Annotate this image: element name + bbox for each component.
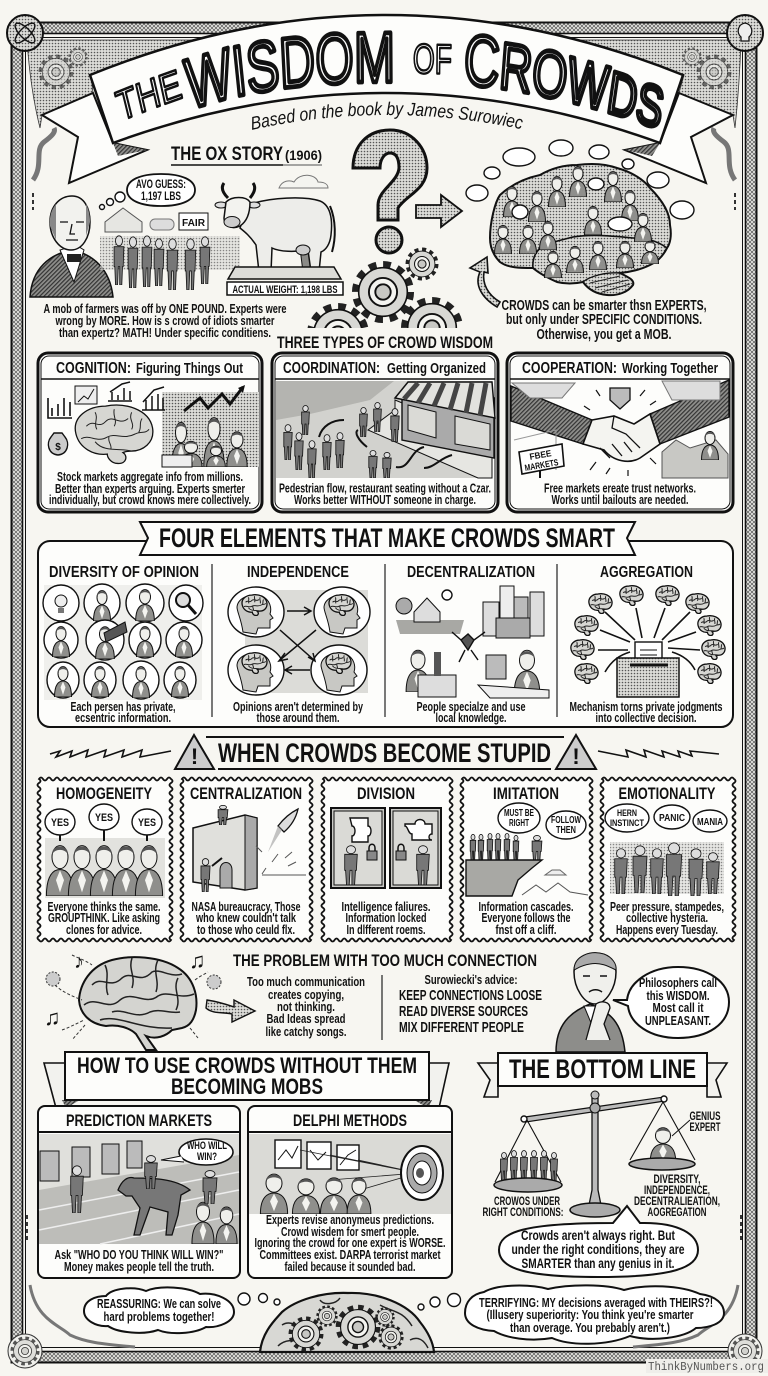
crowds conclusion text: Otherwise, you get a MOB. xyxy=(536,327,672,343)
cognition illustration: $ xyxy=(55,442,61,453)
brain filled with crowd xyxy=(466,140,694,295)
panel: prediction markets: PREDICTION MARKETS xyxy=(66,1111,212,1130)
conditions list xyxy=(634,1172,720,1219)
card: imitation xyxy=(460,778,593,941)
cognition text xyxy=(49,470,251,507)
thought cloud: reassuring: REASSURING: We can solve xyxy=(97,1297,221,1311)
card: homogeneity xyxy=(38,778,172,941)
coordination text xyxy=(279,482,491,507)
thinking man xyxy=(556,953,625,1052)
illustration: horse race betting: WHO WILL xyxy=(187,1140,227,1152)
connected brain illustration: ♫ xyxy=(189,948,206,973)
element: independence: those around them. xyxy=(256,711,340,725)
speech bubble: philosophers: Most call it xyxy=(652,1001,704,1015)
panel: coordination xyxy=(272,353,498,512)
element: decentralization: DECENTRALIZATION xyxy=(407,564,535,581)
panel: prediction markets xyxy=(38,1106,240,1278)
bottom brain with gears xyxy=(260,1293,434,1352)
element: aggregation: into collective decision. xyxy=(596,711,696,725)
element: decentralization xyxy=(396,564,549,725)
banner: how to use crowds: HOW TO USE CROWDS WITHOUT THEM xyxy=(77,1053,417,1078)
cooperation text: Free markets ereate trust networks. xyxy=(544,482,696,496)
thought cloud: terrifying: than overage. You prebably aren't.) xyxy=(510,1321,670,1335)
coordination heading: COORDINATION: xyxy=(283,360,380,377)
cognition text: Stock markets aggregate info from millions. xyxy=(57,470,243,484)
title word: OF: OF xyxy=(413,42,452,75)
element: diversity of opinion: Each persen has private, xyxy=(70,700,176,714)
illustration: cliff followers: RIGHT xyxy=(509,818,529,829)
cognition text: Better than experts arguing. Experts smerter xyxy=(55,482,245,496)
card: imitation: Everyone follows the xyxy=(482,911,571,925)
banner: the bottom line xyxy=(478,1053,727,1097)
card: homogeneity: clones for advice. xyxy=(66,923,142,937)
panel: cognition xyxy=(38,353,262,512)
genius expert label: EXPERT xyxy=(690,1120,721,1134)
illustration: yes-men: YES xyxy=(51,817,69,829)
title word: THE: THE xyxy=(114,68,184,120)
warning icon right xyxy=(556,735,596,769)
cognition text: individually, but crowd knows mere collectively. xyxy=(49,493,251,507)
thought cloud: reassuring: hard problems together! xyxy=(104,1310,214,1324)
gears illustration xyxy=(310,249,460,362)
cooperation text xyxy=(544,482,696,507)
illustration: yes-men: YES xyxy=(138,817,156,829)
panel: delphi methods: Ignoring the crowd for one expert is WORSE. xyxy=(254,1236,446,1250)
coordination text: Pedestrian flow, restaurant seating without a Czar. xyxy=(279,482,491,496)
illustration: ox on plinth xyxy=(215,175,343,296)
illustration: wall and rocket xyxy=(193,805,306,892)
illustration: experts and target xyxy=(249,1134,451,1214)
panel: delphi methods xyxy=(248,1106,452,1278)
speech bubble: bottom line: SMARTER than any genius in it. xyxy=(522,1255,674,1271)
title word: CROWDS: CROWDS xyxy=(465,33,664,128)
conditions list: DIVERSITY, xyxy=(654,1172,700,1186)
cognition illustration xyxy=(48,382,259,467)
card: division: DIVISION xyxy=(357,785,415,803)
illustration: handshake: FBEE xyxy=(529,448,552,462)
cooperation heading: COOPERATION: xyxy=(522,360,617,377)
aggregation diagram xyxy=(571,586,725,697)
heading: when crowds become stupid: WHEN CROWDS BECOME STUPID xyxy=(218,738,551,768)
subtitle xyxy=(252,102,523,130)
speech bubble: bottom line xyxy=(499,1206,698,1277)
independence diagram xyxy=(228,587,370,695)
question mark xyxy=(353,130,427,253)
illustration: cliff followers xyxy=(466,803,588,896)
card: division: In dlfferent roems. xyxy=(346,923,426,937)
conditions list: AOGREGATION xyxy=(648,1205,706,1219)
panel: delphi methods: failed because it sounded bad. xyxy=(284,1260,416,1274)
thought cloud: reassuring xyxy=(84,1287,234,1333)
conditions list: INDEPENDENCE, xyxy=(644,1183,710,1197)
too much communication text: Too much communication xyxy=(247,975,365,989)
connected brain illustration: ♪ xyxy=(74,951,84,973)
ox story text xyxy=(44,302,287,340)
surowiecki advice: Surowiecki's advice: xyxy=(424,973,518,987)
illustration: horse race betting xyxy=(39,1134,239,1244)
surowiecki advice: READ DIVERSE SOURCES xyxy=(399,1003,528,1020)
card: centralization: NASA bureaucracy, Those xyxy=(192,900,301,914)
card: homogeneity: Everyone thinks the same. xyxy=(48,900,160,914)
too much communication text: Bad Ideas spread xyxy=(266,1012,346,1026)
thought cloud: terrifying: (Illusery superiority: You think yeu're smarter xyxy=(486,1308,694,1322)
curved arrow xyxy=(470,257,500,307)
card: imitation: IMITATION xyxy=(493,785,559,803)
illustration: panicked crowd: HERN xyxy=(617,808,637,819)
cooperation heading xyxy=(522,360,718,377)
crowds conclusion text xyxy=(502,298,706,343)
ox story text: A mob of farmers was off by ONE POUND. Experts were xyxy=(44,302,287,316)
banner: how to use crowds xyxy=(44,1052,449,1108)
speech bubble: philosophers: UNPLEASANT. xyxy=(645,1014,711,1028)
crowds under right conditions label: CROWOS UNDER xyxy=(494,1194,560,1208)
speech bubble: philosophers xyxy=(613,967,729,1038)
card: division xyxy=(321,778,453,941)
too much communication text xyxy=(247,975,365,1039)
illustration: cliff followers: FOLLOW xyxy=(551,815,581,826)
title banner xyxy=(40,14,736,185)
illustration: ox on plinth: ACTUAL WEIGHT: 1,198 LBS xyxy=(232,284,338,296)
too much communication text: creates copying, xyxy=(268,988,344,1002)
element: decentralization: local knowledge. xyxy=(436,711,506,725)
element: aggregation xyxy=(570,564,725,725)
card: emotionality: EMOTIONALITY xyxy=(618,785,716,803)
card: homogeneity: GROUPTHINK. Like asking xyxy=(48,911,160,925)
illustration: balance scale xyxy=(482,1091,721,1219)
illustration: cliff followers: THEN xyxy=(556,825,576,836)
coordination heading xyxy=(283,360,486,377)
ox story text: wrong by MORE. How is s crowd of idiots smarter xyxy=(55,314,275,328)
card: emotionality: Happens every Tuesday. xyxy=(616,923,718,937)
illustration: handshake xyxy=(511,380,729,478)
speech bubble: philosophers: this WISDOM. xyxy=(646,989,710,1003)
illustration: panicked crowd xyxy=(605,804,727,896)
card: emotionality: collective hysteria. xyxy=(626,911,708,925)
ox story heading: (1906) xyxy=(285,147,322,163)
thought bubbles left xyxy=(238,1293,280,1305)
three types heading: THREE TYPES OF CROWD WISDOM xyxy=(277,333,493,352)
connection heading: THE PROBLEM WITH TOO MUCH CONNECTION xyxy=(233,951,537,970)
card: centralization xyxy=(180,778,313,941)
ox story heading: THE OX STORY xyxy=(171,144,283,165)
illustration: yes-men: YES xyxy=(95,812,113,824)
banner: the bottom line: THE BOTTOM LINE xyxy=(509,1054,696,1084)
coordination heading: Getting Organized xyxy=(387,361,486,377)
panel: prediction markets: Money makes people tell the truth. xyxy=(64,1260,214,1274)
connected brain illustration xyxy=(44,948,221,1050)
surowiecki advice: MIX DIFFERENT PEOPLE xyxy=(399,1019,524,1036)
surowiecki advice xyxy=(399,973,542,1036)
thought bubbles right xyxy=(418,1294,460,1310)
card: division: Intelligence faliures. xyxy=(342,900,430,914)
coordination illustration: street xyxy=(276,381,495,478)
fair crowd illustration xyxy=(100,208,240,290)
decentralization scenes xyxy=(396,586,549,698)
panel: four elements xyxy=(38,522,733,727)
crowds under right conditions label: RIGHT CONDITIONS: xyxy=(482,1205,564,1219)
conditions list: DECENTRALIEATION, xyxy=(634,1194,720,1208)
panel: delphi methods: Experts revise anonymeus predictions. xyxy=(266,1213,434,1227)
diversity portraits xyxy=(43,584,203,700)
element: aggregation: AGGREGATION xyxy=(600,564,693,581)
title word: WISDOM: WISDOM xyxy=(181,30,393,109)
too much communication text: like catchy songs. xyxy=(266,1025,346,1039)
illustration: cliff followers: MUST BE xyxy=(504,808,534,819)
section: too much connection xyxy=(44,948,729,1052)
card: centralization: who knew couldn't talk xyxy=(195,911,296,925)
illustration: panicked crowd: MANIA xyxy=(697,816,723,828)
element: decentralization: People specialze and use xyxy=(416,700,526,714)
genius expert label: GENIUS xyxy=(690,1109,720,1123)
connected brain illustration: ♫ xyxy=(44,1005,60,1030)
cognition heading: Figuring Things Out xyxy=(136,361,243,377)
thought cloud: terrifying xyxy=(465,1285,724,1344)
card: homogeneity: HOMOGENEITY xyxy=(56,785,152,803)
cognition heading: COGNITION: xyxy=(56,360,131,377)
coordination text: Works better WITHOUT someone in charge. xyxy=(294,493,476,507)
card: division: Information locked xyxy=(346,911,426,925)
portrait: Francis Galton xyxy=(30,196,113,297)
card: emotionality xyxy=(600,778,736,941)
warning icon left xyxy=(175,735,214,769)
speech bubble: philosophers: Philosophers call xyxy=(639,976,717,990)
element: diversity of opinion xyxy=(43,564,203,725)
speech bubble: bottom line: under the right conditions, they are xyxy=(512,1241,685,1257)
arrow to text xyxy=(206,1000,255,1022)
illustration: panicked crowd: PANIC xyxy=(659,812,685,824)
element: independence: INDEPENDENCE xyxy=(247,564,349,581)
illustration: handshake: MARKETS xyxy=(524,457,559,473)
panel: delphi methods: DELPHI METHODS xyxy=(293,1111,407,1130)
card: emotionality: Peer pressure, stampedes, xyxy=(610,900,724,914)
cognition heading xyxy=(56,360,243,377)
banner: how to use crowds: BECOMING MOBS xyxy=(171,1074,323,1099)
card: centralization: to those who ceuld flx. xyxy=(197,923,295,937)
panel: delphi methods: Crowd wisdem for smert people. xyxy=(281,1225,419,1239)
card: imitation: fnst off a cliff. xyxy=(496,923,556,937)
illustration: yes-men xyxy=(45,804,165,898)
heading: when crowds become stupid xyxy=(50,735,719,769)
element: independence: Opinions aren't determined by xyxy=(233,700,363,714)
cooperation heading: Working Together xyxy=(622,361,718,377)
card: imitation: Information cascades. xyxy=(478,900,574,914)
card: centralization: CENTRALIZATION xyxy=(190,785,302,803)
panel: prediction markets: Ask "WHO DO YOU THINK WILL WIN?" xyxy=(54,1248,224,1262)
warning icon left: ! xyxy=(191,744,198,769)
illustration: horse race betting: WIN? xyxy=(197,1151,217,1163)
warning icon right: ! xyxy=(572,744,580,769)
thought bubble: average guess: AVO GUESS: xyxy=(136,177,186,191)
arrow to brain xyxy=(416,195,462,227)
panel: cooperation xyxy=(507,353,733,512)
thought bubble: average guess: 1,197 LBS xyxy=(141,189,181,203)
too much communication text: not thinking. xyxy=(277,1000,335,1014)
surowiecki advice: KEEP CONNECTIONS LOOSE xyxy=(399,987,542,1004)
title word: OF xyxy=(413,42,452,75)
element: independence xyxy=(228,564,370,725)
element: diversity of opinion: DIVERSITY OF OPINION xyxy=(49,564,199,581)
panel: delphi methods: Committees exist. DARPA terrorist market xyxy=(260,1248,441,1262)
cooperation text: Works until bailouts are needed. xyxy=(552,493,688,507)
thought bubble: average guess xyxy=(100,174,195,210)
illustration: locked rooms xyxy=(331,808,441,888)
ox story text: than expertz? MATH! Under specific conditiens. xyxy=(59,326,271,340)
right pan: genius xyxy=(629,1128,695,1170)
speech bubble: bottom line: Crowds aren't always right. But xyxy=(521,1227,675,1243)
left pan: crowd xyxy=(494,1151,562,1192)
element: diversity of opinion: ecsentric information. xyxy=(75,711,171,725)
fair crowd illustration: FAIR xyxy=(182,218,206,229)
illustration: panicked crowd: INSTINCT xyxy=(610,818,644,829)
crowds under right conditions label xyxy=(482,1194,564,1219)
genius expert label xyxy=(690,1109,721,1134)
section: ox story xyxy=(30,130,706,362)
